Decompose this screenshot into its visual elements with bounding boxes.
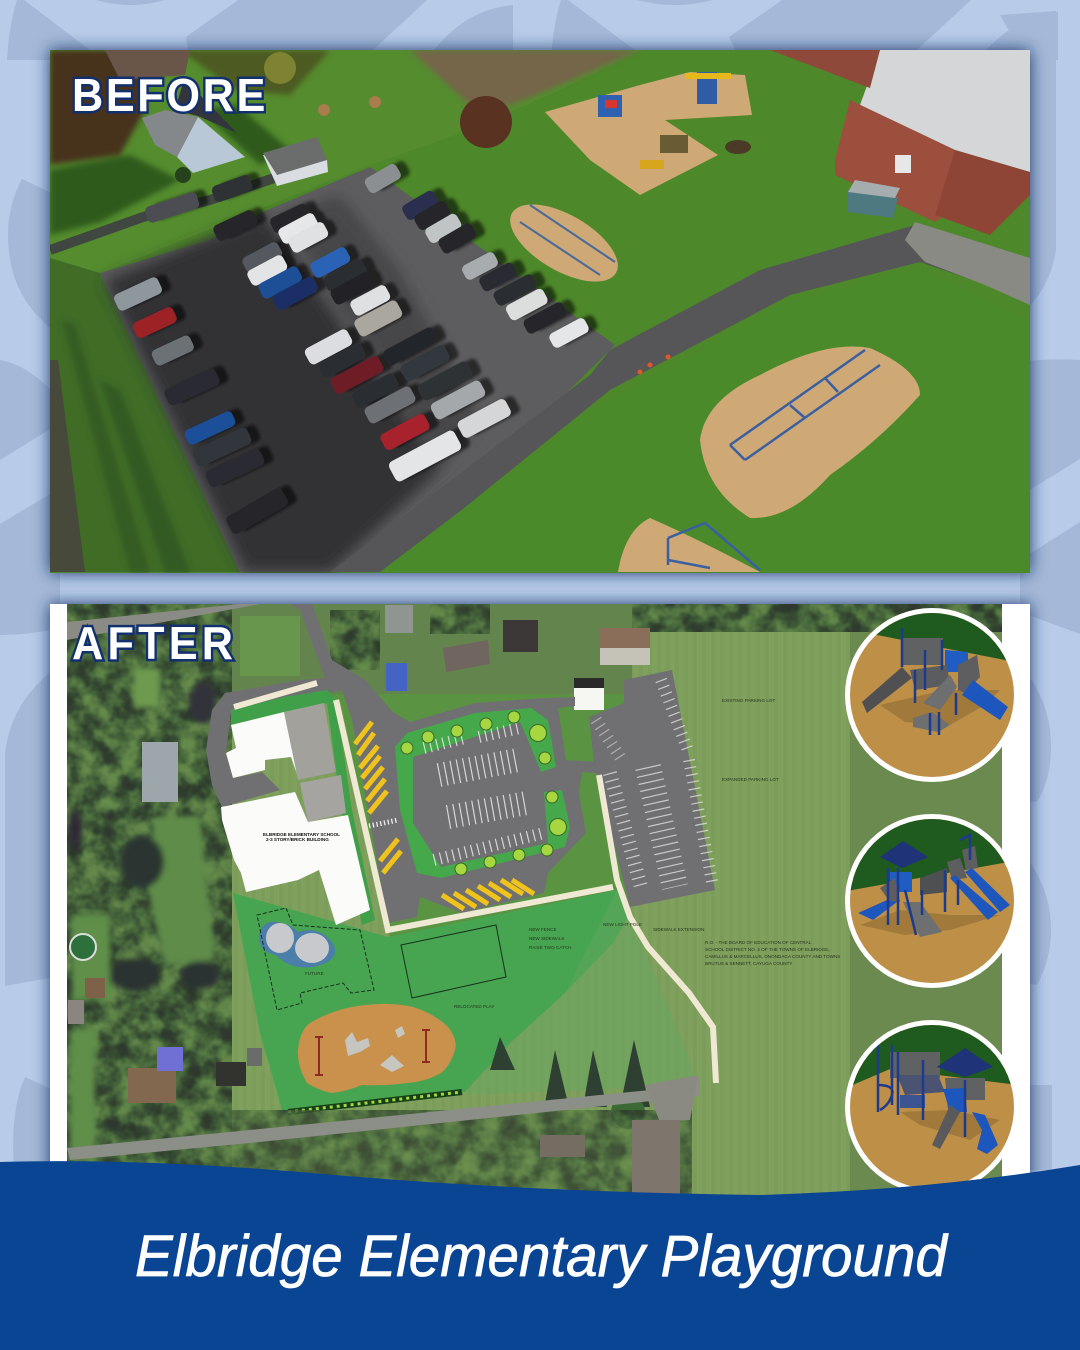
green site overlay	[233, 890, 695, 1113]
house	[142, 83, 245, 183]
school building	[770, 50, 1030, 235]
site plan notes: NEW FENCE	[529, 927, 557, 932]
access path	[330, 225, 1030, 572]
site plan notes: SCHOOL DISTRICT NO. 2 OF THE TOWNS OF ELBRIDGE,	[705, 947, 830, 952]
swing frames	[668, 350, 880, 570]
parking lot	[100, 167, 615, 572]
school building roofs	[221, 703, 370, 925]
main playground mulch	[298, 1004, 456, 1093]
site plan notes: EXISTING PARKING LOT	[722, 698, 775, 703]
playground render circle 3	[845, 1020, 1019, 1194]
old play equipment top	[520, 72, 751, 275]
mulch area lower	[700, 347, 920, 518]
site plan notes: EXPANDED PARKING LOT	[722, 777, 779, 782]
playground render circle 2	[845, 814, 1019, 988]
small play area	[259, 922, 335, 968]
yellow bus bays	[355, 722, 534, 909]
school building roofs: 2-3 STORY/BRICK BUILDING	[266, 837, 329, 842]
sidewalk paths	[234, 683, 716, 1083]
site plan notes	[305, 698, 840, 1009]
school building roofs: ELBRIDGE ELEMENTARY SCHOOL	[263, 832, 340, 837]
neighbourhood strip top	[67, 604, 1002, 710]
after plan panel	[50, 604, 1030, 1204]
site plan notes: SIDEWALK EXTENSION	[653, 927, 704, 932]
school green strips	[231, 690, 375, 925]
left grass strip	[50, 258, 240, 572]
cars	[112, 162, 590, 536]
street and south homes	[67, 742, 700, 1204]
round shrubs	[401, 711, 566, 875]
mulch areas top	[510, 72, 752, 282]
title banner	[0, 1161, 1080, 1350]
orange cones	[638, 354, 670, 374]
before label: BEFORE	[72, 71, 268, 121]
lawn around new parking	[330, 694, 630, 936]
before photo panel	[50, 50, 1030, 573]
wooded left side	[67, 604, 232, 1204]
site plan notes: BRUTUS & SENNETT, CAYUGA COUNTY	[705, 961, 792, 966]
title: Elbridge Elementary Playground	[135, 1224, 949, 1289]
lower lawn	[380, 510, 462, 572]
site plan notes: RELOCATED PLAY	[454, 1004, 494, 1009]
shed	[263, 137, 328, 186]
playground render circle 1	[845, 608, 1019, 782]
site plan notes: RAISE TWO CATCH	[529, 945, 571, 950]
aerial base	[232, 632, 850, 1195]
new bus road and parking	[332, 660, 715, 923]
tree line south	[288, 1037, 650, 1129]
site plan notes: FUTURE	[305, 971, 324, 976]
after label: AFTER	[72, 619, 237, 669]
wooded yard top left	[50, 50, 640, 273]
access road and school drive	[206, 604, 345, 807]
dashed outline and field	[257, 908, 506, 1010]
site plan notes: NEW SIDEWALK	[529, 936, 565, 941]
site plan notes: CAMILLUS & MARCELLUS, ONONDAGA COUNTY AND TOWNS	[705, 954, 840, 959]
site plan notes: R.O. - THE BOARD OF EDUCATION OF CENTRAL	[705, 940, 812, 945]
site plan notes: NEW LIGHT POLE	[603, 922, 642, 927]
woods east edge	[850, 604, 1002, 1204]
